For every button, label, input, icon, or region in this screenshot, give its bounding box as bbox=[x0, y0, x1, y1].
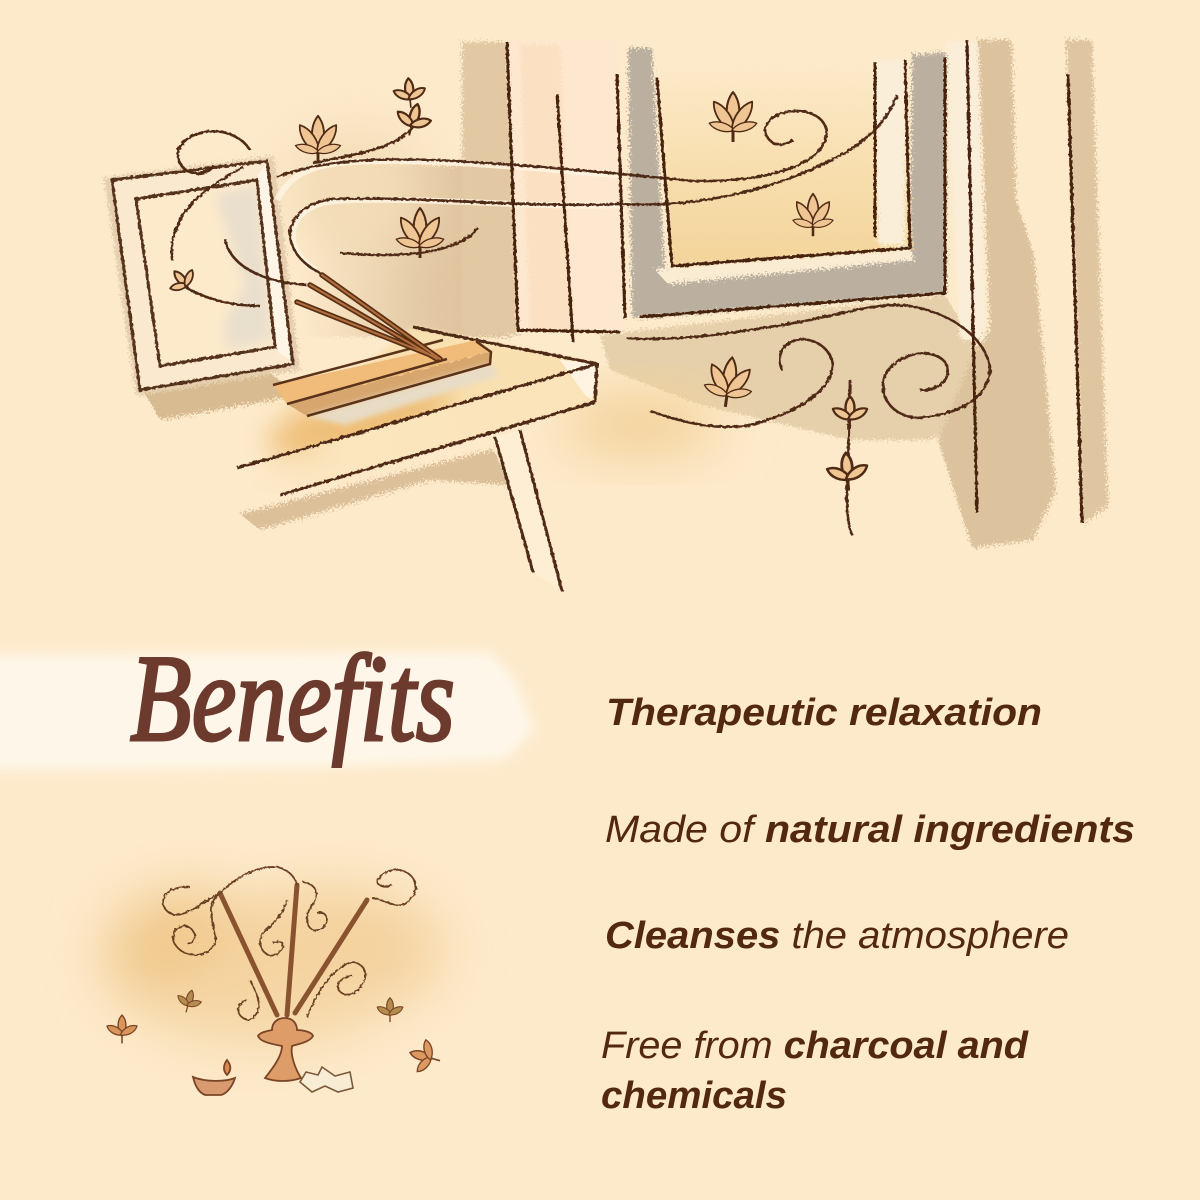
diya lamp bbox=[193, 1060, 235, 1095]
leaf motifs bbox=[162, 77, 871, 492]
illustration: room with incense on a table bbox=[104, 40, 1108, 591]
item 4, second line: chemicals bbox=[601, 1075, 787, 1117]
item 1: Therapeutic relaxation bbox=[606, 692, 1042, 734]
flowers bbox=[300, 1067, 353, 1092]
heading: Benefits bbox=[130, 630, 455, 767]
item 3: Cleanses the atmosphere bbox=[605, 915, 1069, 957]
incense holder bbox=[273, 275, 500, 425]
banner: Benefits brush stroke bbox=[0, 630, 535, 770]
leaves bbox=[105, 987, 445, 1078]
glow bbox=[105, 885, 445, 1045]
item 4: Free from charcoal and bbox=[601, 1025, 1029, 1067]
smoke swirls bbox=[172, 95, 990, 535]
sticks bbox=[220, 885, 367, 1015]
benefit list bbox=[601, 692, 1135, 1117]
picture frame bbox=[104, 156, 300, 420]
holder bbox=[258, 1018, 313, 1081]
swirls bbox=[163, 867, 416, 1020]
item 2: Made of natural ingredients bbox=[605, 809, 1135, 851]
soft glow bbox=[285, 130, 425, 250]
wall shading bbox=[300, 40, 1108, 548]
table bbox=[237, 327, 597, 591]
window and wall lines bbox=[507, 40, 1082, 523]
illustration: incense sticks in a holder bbox=[105, 867, 445, 1095]
